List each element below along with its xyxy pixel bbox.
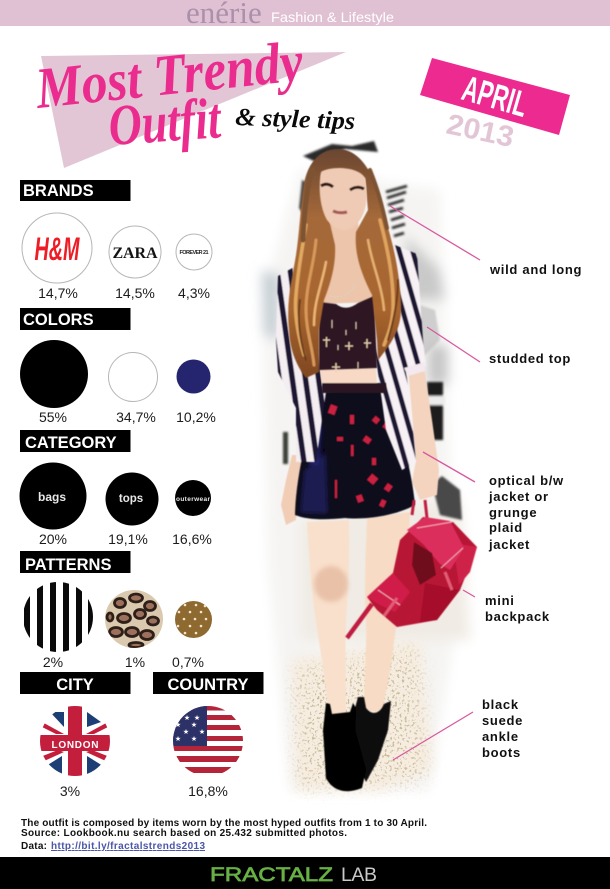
heading: country: COUNTRY [168, 676, 248, 694]
heading: city: CITY [56, 676, 94, 694]
values: brands: 14,5% [115, 285, 155, 301]
icon: Zara [109, 226, 161, 278]
title block: Most Trendy [32, 28, 306, 121]
value: country: 16,8% [188, 783, 228, 799]
label: jacket [488, 473, 564, 552]
pointer line: backpack [463, 590, 475, 597]
values: category: 19,1% [108, 531, 148, 547]
icon: H&M: H&M [34, 231, 80, 267]
label: black suede ankle boots [482, 697, 523, 760]
icon: Forever 21 [176, 234, 212, 270]
footer band: Fractal Lab logo: FRACTALZ [210, 864, 333, 886]
panel: city [20, 672, 130, 799]
panel: colors [20, 308, 216, 425]
label: mini backpack: mini [485, 593, 515, 608]
bubble: tops [106, 472, 158, 526]
heading: colors [20, 308, 130, 330]
values: patterns: 1% [125, 654, 145, 670]
panel: category [20, 430, 212, 547]
header band [0, 0, 610, 30]
bubble: outerwear: outerwear [176, 496, 210, 503]
values: brands [38, 285, 210, 301]
icon: US flag: ★ [175, 721, 181, 729]
icon: US flag: ★ [175, 735, 181, 743]
title block: Outfit [106, 85, 224, 158]
values: brands: 4,3% [178, 285, 210, 301]
title block [32, 28, 356, 168]
values: patterns [43, 654, 204, 670]
icon: US flag: ★ [199, 728, 205, 736]
source note: The outfit is composed by items worn by the most hyped outfits from 1 to 30 April. [21, 818, 427, 829]
heading: colors: COLORS [23, 311, 94, 329]
label: jacket: jacket or [488, 489, 549, 504]
necklace [330, 284, 356, 297]
heading: category: CATEGORY [25, 434, 117, 452]
values: brands: 14,7% [38, 285, 78, 301]
values: colors [39, 409, 216, 425]
pointer line: boots [393, 712, 473, 760]
studded crop top [319, 296, 377, 372]
label: studded top: studded top [489, 351, 571, 366]
midriff and neck [316, 222, 386, 393]
values: patterns: 2% [43, 654, 63, 670]
values: category: 16,6% [172, 531, 212, 547]
fashion photo: model in outfit [262, 141, 477, 791]
value: city: 3% [60, 783, 80, 799]
values: patterns: 0,7% [172, 654, 204, 670]
swatch: black [20, 340, 88, 408]
icon: Zara: ZARA [112, 245, 158, 262]
long wavy hair [288, 149, 401, 378]
icon: US flag [173, 706, 243, 776]
panel: patterns [20, 551, 214, 670]
source note [21, 818, 427, 852]
arms [281, 366, 439, 525]
date badge: April 2013: APRIL [458, 67, 533, 125]
label: black suede ankle boots: suede [482, 713, 523, 728]
values: colors: 55% [39, 409, 67, 425]
legs [307, 512, 410, 714]
label: mini backpack: backpack [485, 609, 550, 624]
icon: UK flag with London: LONDON [52, 740, 98, 751]
heading: brands [20, 180, 130, 201]
icon: US flag: ★ [184, 714, 190, 722]
header band: Fashion & Lifestyle [271, 9, 394, 25]
values: colors: 34,7% [116, 409, 156, 425]
bubble: bags [20, 462, 86, 530]
panel: country [153, 672, 264, 799]
label: black suede ankle boots: boots [482, 745, 521, 760]
bubble: outerwear [175, 480, 211, 516]
pointer line: hair [390, 206, 480, 260]
values: category [39, 531, 212, 547]
heading: patterns: PATTERNS [25, 556, 111, 574]
pointer line: jacket [423, 452, 475, 482]
source note: http://bit.ly/fractalstrends2013 [51, 841, 205, 852]
source note: Source: Lookbook.nu search based on 25.432 submitted photos. [21, 828, 347, 839]
swatch: polka dots [175, 601, 212, 638]
icon: US flag: ★ [183, 728, 189, 736]
ankle boots [323, 697, 391, 791]
swatch: white [108, 352, 158, 402]
label: jacket: grunge [489, 505, 537, 520]
source note: Data: [21, 841, 47, 852]
date badge: April 2013 [420, 58, 570, 154]
jacket left and right panels [276, 243, 426, 470]
red mini backpack [347, 500, 477, 638]
heading: category [20, 430, 130, 452]
title block: & style tips [235, 104, 356, 135]
label: black suede ankle boots: black [482, 697, 519, 712]
swatch: leopard [105, 590, 163, 648]
label: wild and long: wild and long [489, 262, 582, 277]
date badge: April 2013: 2013 [444, 109, 517, 154]
face [320, 168, 367, 230]
label: mini backpack [485, 593, 550, 624]
icon: US flag: ★ [194, 714, 200, 722]
label: jacket: plaid [489, 520, 523, 535]
ground [292, 640, 432, 790]
values: category: 20% [39, 531, 67, 547]
bubble: bags: bags [38, 490, 66, 504]
footer band: Fractal Lab logo [0, 857, 610, 889]
icon: US flag: ★ [191, 721, 197, 729]
skirt [295, 390, 415, 519]
swatch: stripes [23, 582, 93, 652]
footer band: Fractal Lab logo: LAB [341, 864, 377, 886]
backdrop brush strokes [262, 141, 470, 790]
icon: Forever 21: FOREVER 21 [180, 250, 208, 256]
bubble: tops: tops [119, 493, 143, 505]
label: jacket: jacket [488, 537, 530, 552]
icon: US flag: ★ [191, 735, 197, 743]
values: colors: 10,2% [176, 409, 216, 425]
heading: patterns [20, 551, 130, 574]
swatch: navy [176, 360, 210, 394]
panel: brands [20, 180, 212, 301]
pointer line: top [427, 327, 480, 362]
label: black suede ankle boots: ankle [482, 729, 519, 744]
icon: H&M [22, 213, 92, 283]
heading: brands: BRANDS [23, 182, 94, 200]
label: jacket: optical b/w [489, 473, 564, 488]
